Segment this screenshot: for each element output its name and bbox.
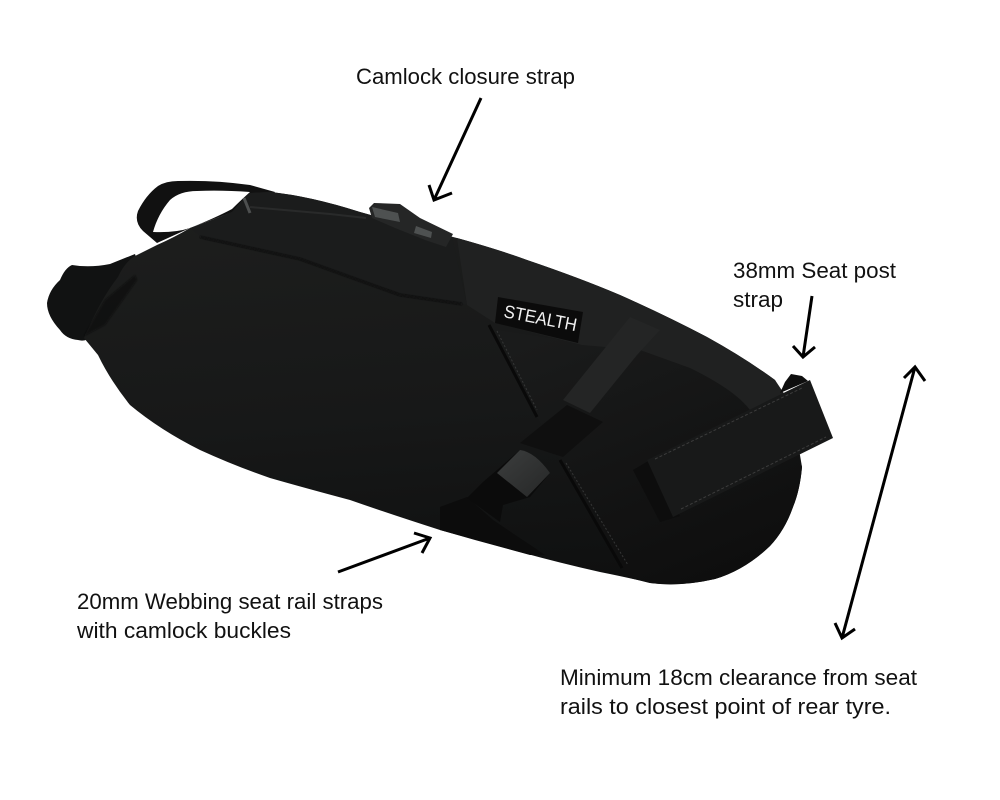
buckle shape — [369, 203, 453, 247]
seat post strap — [633, 374, 833, 522]
callout: clearance — [560, 367, 925, 719]
camlock buckle: lower — [467, 450, 550, 522]
roll-top end — [47, 254, 150, 341]
label: 38mm Seat post — [733, 258, 896, 283]
lower strap to rail — [440, 497, 545, 555]
callout: seat rail straps — [76, 533, 430, 643]
brand name: STEALTH — [502, 301, 579, 335]
strap keeper — [520, 405, 603, 457]
panel seam shadow — [200, 237, 462, 304]
label: 20mm Webbing seat rail straps — [77, 589, 383, 614]
buckle highlight left — [372, 207, 400, 222]
arrow — [338, 533, 430, 572]
right top panel — [457, 238, 785, 410]
post strap tip — [780, 374, 808, 393]
double-headed arrow — [835, 367, 925, 638]
buckle highlight right — [414, 226, 432, 238]
label patch — [495, 297, 583, 343]
dark lower end cap — [497, 330, 802, 584]
label: with camlock buckles — [76, 618, 291, 643]
top strap line — [250, 207, 366, 218]
brand label — [495, 297, 583, 343]
outer loop — [633, 460, 680, 522]
buckle body — [467, 450, 550, 522]
label: Minimum 18cm clearance from seat — [560, 665, 917, 690]
main bag body — [84, 192, 802, 584]
callout: seat post strap — [733, 258, 896, 357]
product photo: saddle bag — [47, 181, 833, 584]
bag handle loop — [137, 181, 275, 243]
arrow — [793, 296, 815, 357]
arrow — [429, 98, 481, 200]
top camlock buckle — [369, 203, 453, 247]
callout: camlock closure strap — [356, 64, 575, 200]
seat rail strap webbing — [563, 317, 660, 413]
label: strap — [733, 287, 783, 312]
label: rails to closest point of rear tyre. — [560, 694, 891, 719]
upper fabric panel — [190, 192, 467, 305]
strap face — [647, 380, 833, 517]
stitching — [497, 331, 628, 565]
side seam lines — [489, 325, 622, 568]
strap stitching — [655, 388, 826, 509]
roll fold shadow — [84, 275, 137, 336]
buckle highlight — [497, 450, 550, 497]
drawcord toggle — [244, 198, 250, 213]
label: Camlock closure strap — [356, 64, 575, 89]
